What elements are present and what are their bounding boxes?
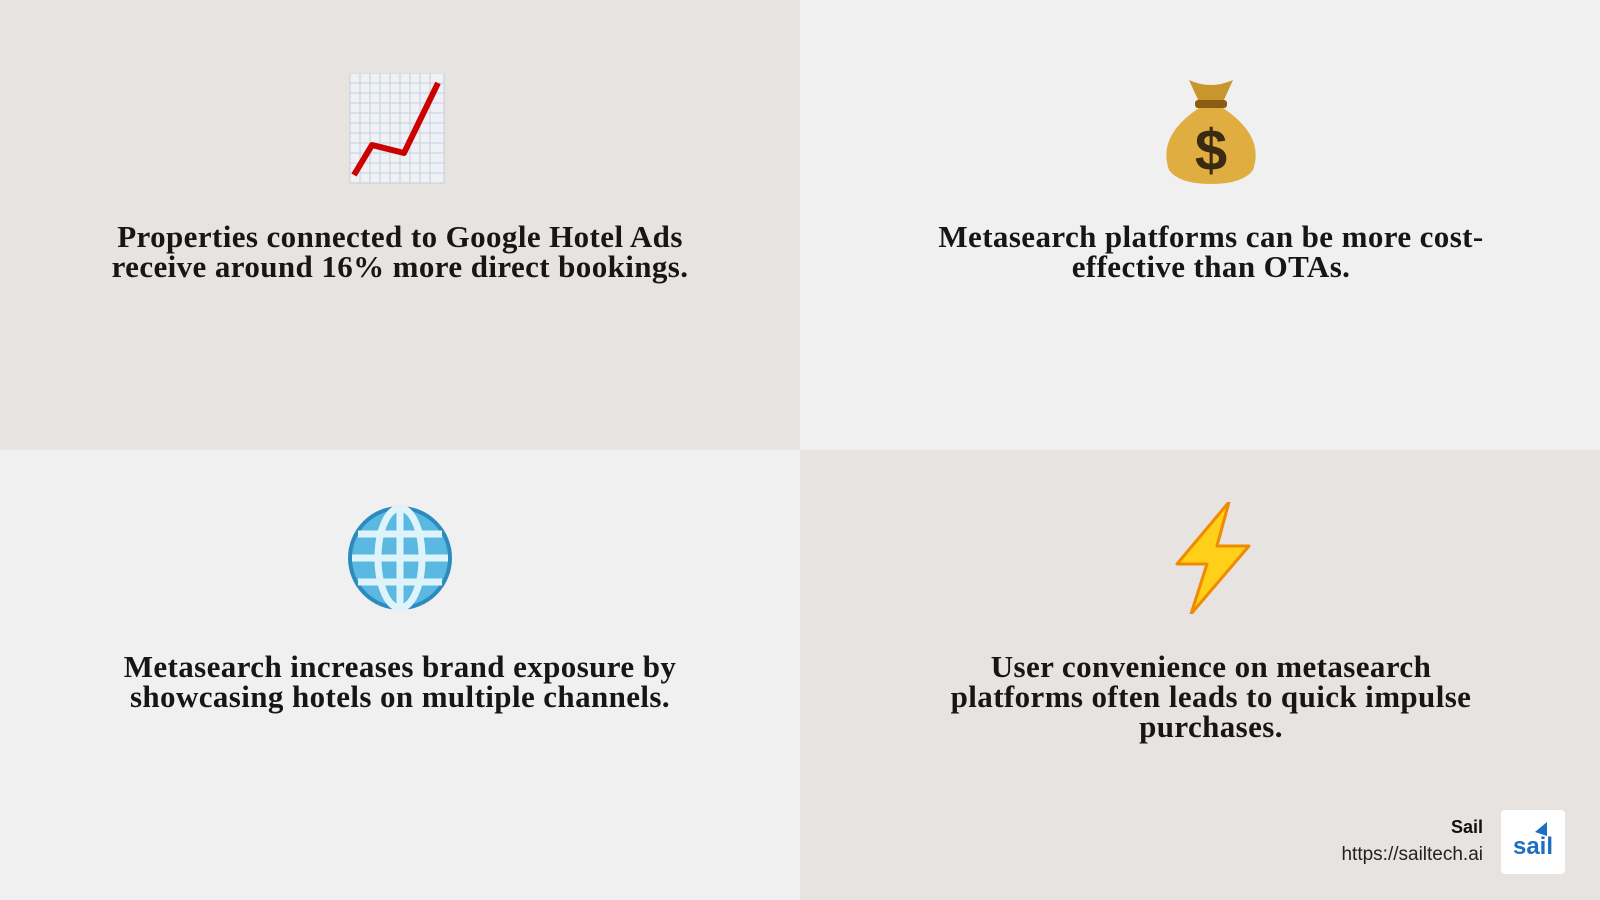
logo: sail xyxy=(1513,833,1553,860)
text: Properties connected to Google Hotel Ads xyxy=(117,219,683,254)
text: purchases. xyxy=(1139,709,1283,744)
text: Metasearch increases brand exposure by xyxy=(124,649,676,684)
icon: lightning xyxy=(1175,502,1251,614)
text: showcasing hotels on multiple channels. xyxy=(130,679,670,714)
logo xyxy=(1501,810,1565,874)
icon: money bag xyxy=(1166,80,1256,184)
text: User convenience on metasearch xyxy=(991,649,1431,684)
url: https://sailtech.ai xyxy=(1341,844,1483,865)
text: platforms often leads to quick impulse xyxy=(951,679,1471,714)
text: Metasearch platforms can be more cost- xyxy=(938,219,1484,254)
text: receive around 16% more direct bookings. xyxy=(112,249,688,284)
text xyxy=(938,219,1484,284)
icon: chart xyxy=(350,73,444,184)
panel: google hotel ads xyxy=(0,0,800,450)
panel: brand exposure xyxy=(0,450,800,900)
panel: user convenience xyxy=(800,450,1600,900)
text: effective than OTAs. xyxy=(1072,249,1350,284)
panel: cost-effective xyxy=(800,0,1600,450)
icon: money bag: $ xyxy=(1195,118,1227,183)
text xyxy=(124,649,676,714)
icon: globe xyxy=(348,504,452,612)
text xyxy=(112,219,688,284)
brand name: Sail xyxy=(1451,817,1483,837)
text xyxy=(951,649,1471,744)
